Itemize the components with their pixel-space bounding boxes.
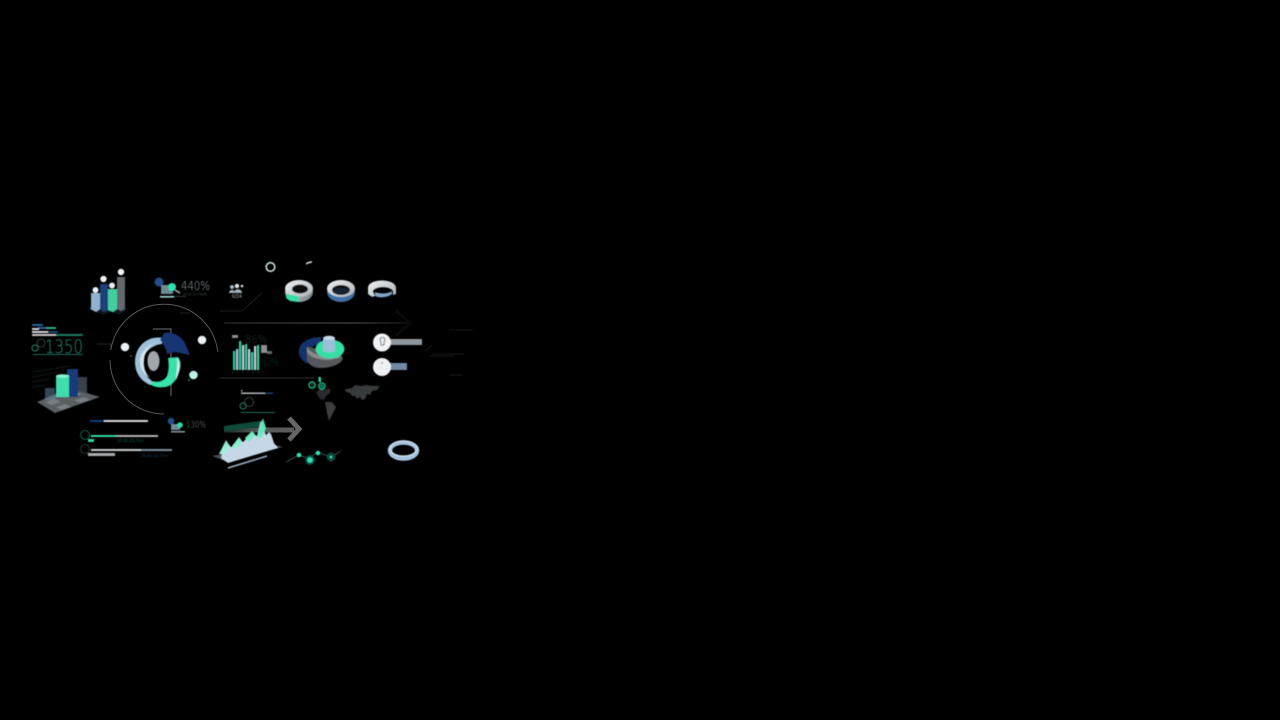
connector lines top [97, 293, 473, 378]
ring chart 3 [368, 280, 396, 297]
progress bars: 25.92.23.TAA [117, 438, 144, 443]
mini gauge block [240, 390, 275, 413]
main donut chart with dial [110, 304, 218, 414]
3D pie chart [299, 336, 344, 368]
ring bottom right [390, 441, 417, 458]
stat: 130 percent: 130% [186, 420, 206, 430]
icon: people count 6/24 [229, 284, 243, 300]
stat: 1350 with stacked bars [32, 324, 83, 358]
column chart with percentages: 62% [261, 356, 279, 369]
ring chart 2 [327, 280, 355, 302]
stat: 130 percent [168, 418, 206, 432]
crosshair bracket [153, 329, 171, 396]
arrow [224, 418, 299, 440]
column chart with percentages: 86% [245, 333, 267, 346]
column chart with percentages [232, 333, 279, 374]
ring chart 1 [285, 280, 313, 302]
stat: 440 percent [154, 278, 210, 298]
donut segments [135, 333, 190, 387]
world map [309, 377, 380, 421]
stat: 440 percent: 440% [181, 279, 210, 293]
progress bars: 25.92.23.TAA [141, 453, 168, 458]
isometric 3D bar chart [32, 366, 100, 413]
network line chart [286, 451, 341, 465]
stat: 440 percent: 30 12 21 FINAL [183, 292, 208, 296]
small ring and arc top [266, 262, 312, 271]
icon: people count 6/24: 6/24 [232, 294, 242, 300]
column chart with percentages: 1 2 3 4 5 6 7 [232, 371, 265, 374]
3D area chart [212, 418, 283, 468]
dial circle [110, 304, 218, 414]
progress bars [80, 420, 172, 458]
toggle bars [373, 334, 422, 376]
icon: isometric people bar chart [87, 269, 128, 315]
stat: 1350 with stacked bars: 1350 [45, 336, 83, 358]
dial markers [121, 336, 206, 381]
